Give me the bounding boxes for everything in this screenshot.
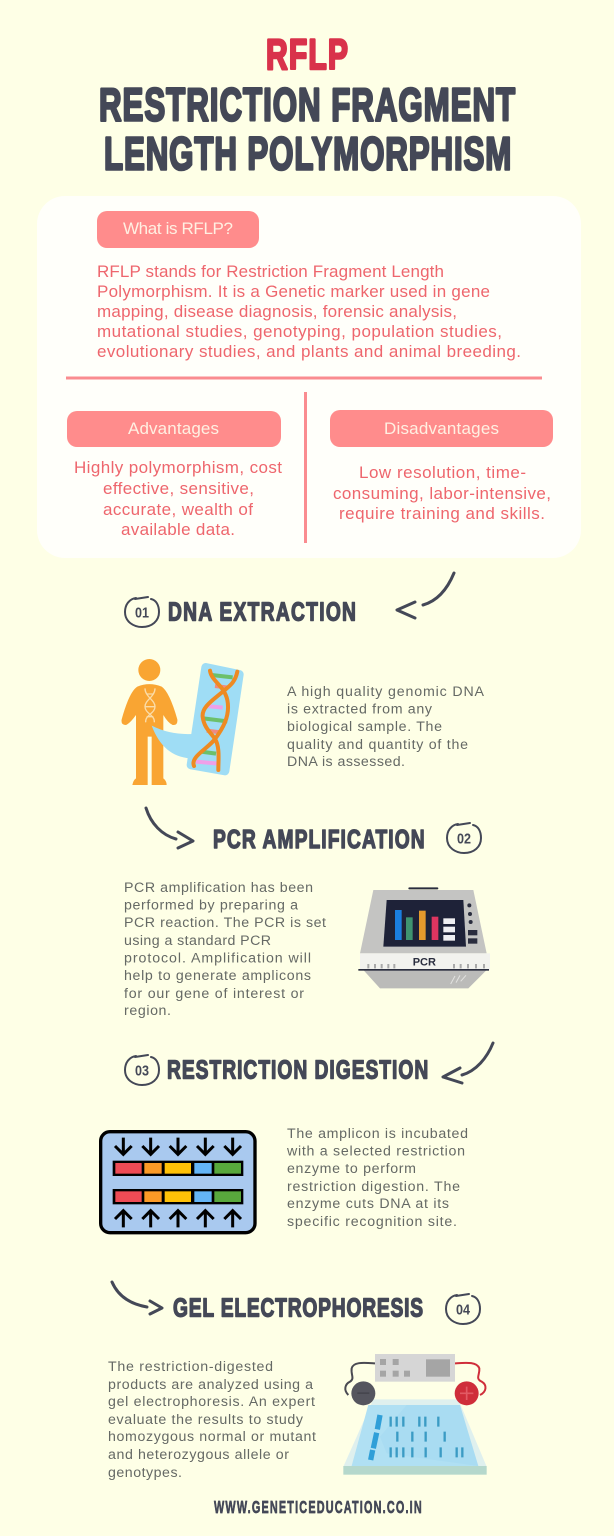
text block: step 3: The amplicon is incubated (287, 1126, 468, 1142)
icon: PCR machine (358, 887, 490, 988)
text block: step 1: DNA is assessed. (287, 754, 405, 770)
text block: step 4: homozygous normal or mutant (108, 1429, 316, 1445)
text block: step 2: region. (124, 1003, 171, 1019)
number badge 03: 03 (135, 1062, 149, 1080)
text block: RFLP definition: Polymorphism. It is a Genetic marker used in gene (97, 282, 490, 301)
panel: RFLP overview card (37, 196, 581, 558)
number badge 01 (125, 597, 159, 627)
title (99, 30, 515, 180)
heading pill: What is RFLP?: What is RFLP? (123, 219, 233, 238)
text block: advantages: Highly polymorphism, cost (74, 458, 282, 477)
text block: step 3 (286, 1126, 468, 1230)
number badge 03 (125, 1055, 159, 1085)
text block: step 2: help to generate amplicons (124, 968, 311, 984)
heading text: PCR AMPLIFICATION (213, 824, 425, 854)
text block: step 4: The restriction-digested (108, 1359, 273, 1375)
text block: advantages: effective, sensitive, (103, 479, 254, 498)
text block: RFLP definition: evolutionary studies, and plants and animal breeding. (97, 342, 521, 361)
text block: RFLP definition: mapping, disease diagnosis, forensic analysis, (97, 302, 457, 321)
number badge 02 (447, 823, 481, 853)
text block: step 4: evaluate the results to study (108, 1412, 304, 1428)
text block: step 3: restriction digestion. The (287, 1179, 460, 1195)
step 4 heading (173, 1293, 480, 1324)
footer website: WWW.GENETICEDUCATION.CO.IN (214, 1499, 422, 1518)
number badge 01: 01 (135, 604, 149, 622)
text block: step 1: biological sample. The (287, 719, 442, 735)
icon: gel electrophoresis apparatus (343, 1354, 487, 1475)
heading text: GEL ELECTROPHORESIS (173, 1293, 423, 1322)
number badge 04: 04 (456, 1302, 471, 1318)
text block: advantages (74, 458, 282, 539)
text block: step 3: enzyme to perform (287, 1161, 416, 1177)
text block: advantages: accurate, wealth of (103, 500, 253, 519)
text block: step 4: genotypes. (108, 1465, 182, 1481)
text block: RFLP definition (97, 262, 521, 361)
text block: step 2: using a standard PCR (124, 933, 271, 949)
title: RFLP: RFLP (266, 30, 348, 78)
heading pill: Advantages (67, 411, 281, 447)
heading pill: What is RFLP? (97, 211, 259, 248)
title: line two: LENGTH POLYMORPHISM (104, 129, 511, 180)
text block: disadvantages: Low resolution, time- (359, 463, 526, 482)
icon: person with DNA helix (122, 659, 239, 785)
arrow: to step 3 (443, 1043, 493, 1083)
number badge 04 (446, 1294, 480, 1324)
icon: PCR machine: PCR (413, 957, 436, 969)
text block: step 1: A high quality genomic DNA (287, 684, 485, 700)
text block: step 1: is extracted from any (287, 702, 433, 718)
title: line one: RESTRICTION FRAGMENT (99, 80, 515, 131)
arrow: to step 2 (146, 808, 193, 848)
number badge 02: 02 (457, 830, 471, 848)
text block: disadvantages: consuming, labor-intensive, (333, 484, 551, 503)
step 3 heading (125, 1055, 428, 1085)
heading text: RESTRICTION DIGESTION (167, 1055, 428, 1084)
text block: step 2: protocol. Amplification will (124, 951, 311, 967)
text block: step 4 (108, 1359, 316, 1481)
icon: restriction digestion diagram (101, 1132, 255, 1233)
heading pill: Disadvantages: Disadvantages (384, 419, 499, 438)
text block: step 3: enzyme cuts DNA at its (287, 1196, 449, 1212)
heading text: DNA EXTRACTION (168, 597, 356, 626)
text block: advantages: available data. (121, 520, 235, 539)
heading pill: Disadvantages (330, 410, 553, 447)
text block: step 4: products are analyzed using a (108, 1377, 313, 1393)
text block: RFLP definition: RFLP stands for Restriction Fragment Length (97, 262, 444, 281)
step 1 heading (125, 597, 356, 627)
text block: disadvantages (333, 463, 551, 523)
step 2 heading (213, 823, 481, 854)
text block: step 1: quality and quantity of the (287, 737, 468, 753)
text block: RFLP definition: mutational studies, genotyping, population studies, (97, 322, 502, 341)
text block: disadvantages: require training and skills. (339, 504, 545, 523)
text block: step 2 (124, 880, 326, 1019)
text block: step 1 (287, 684, 485, 770)
text block: step 2: PCR amplification has been (124, 880, 313, 896)
text block: step 4: gel electrophoresis. An expert (108, 1394, 315, 1410)
arrow: to step 4 (112, 1282, 162, 1314)
text block: step 3: with a selected restriction (286, 1144, 465, 1160)
text block: step 2: for our gene of interest or (124, 986, 304, 1002)
text block: step 2: performed by preparing a (124, 898, 298, 914)
arrow: to step 1 (397, 573, 454, 618)
heading pill: Advantages: Advantages (128, 419, 219, 438)
text block: step 3: specific recognition site. (287, 1214, 457, 1230)
text block: step 2: PCR reaction. The PCR is set (124, 915, 326, 931)
text block: step 4: and heterozygous allele or (108, 1447, 289, 1463)
